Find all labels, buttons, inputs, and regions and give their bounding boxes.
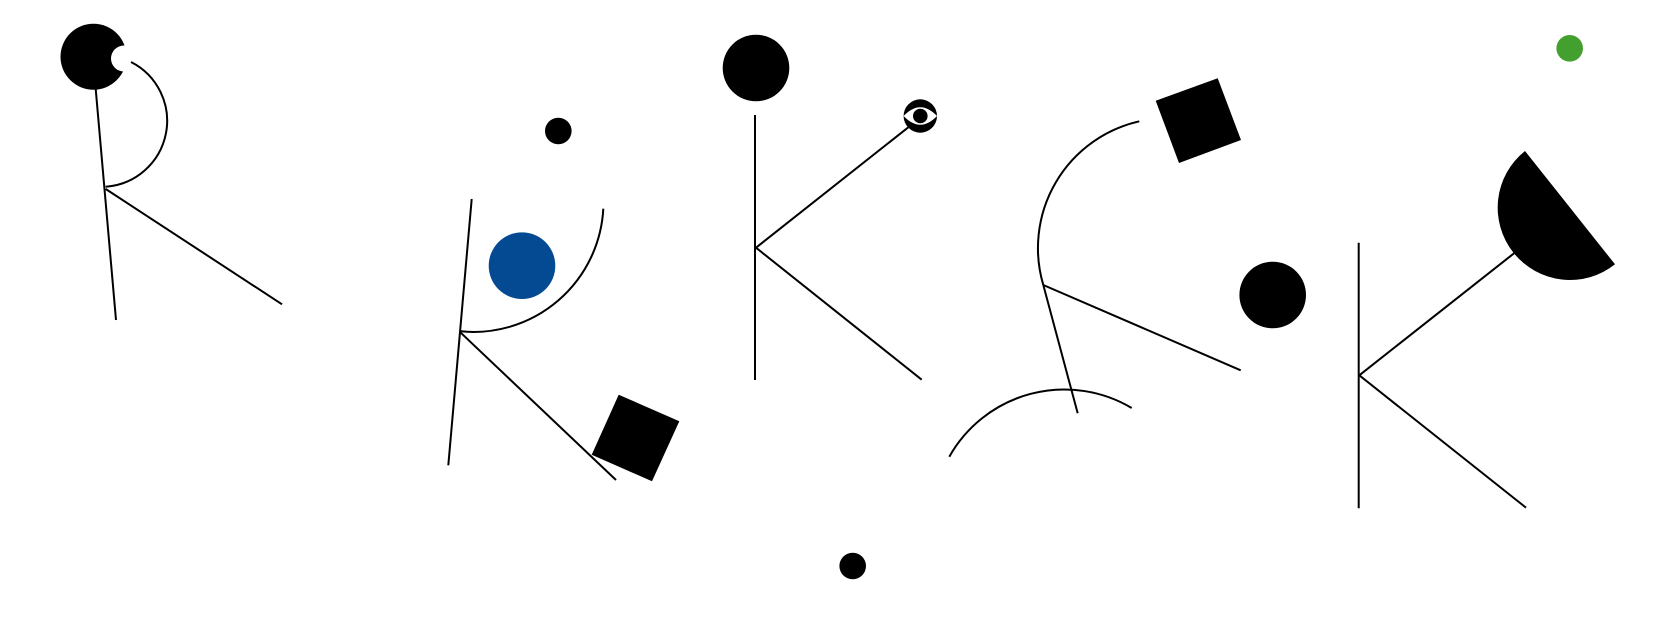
diagonal leg [1043,285,1241,370]
letter K five: half circle and green dot [1359,35,1615,508]
lower leg [1359,375,1526,508]
lower leg [756,248,922,380]
stem line [448,199,472,465]
black circle between letters [1239,262,1306,328]
icon: eye [904,99,937,133]
large black circle [723,35,789,101]
black tilted square [1156,78,1241,163]
upper arm [1359,253,1514,375]
letter R two: blue circle, arc and square [448,118,679,481]
stem line [754,115,756,380]
diagonal leg [461,333,616,480]
letter R four: rotated with square and lower arc [949,78,1241,457]
upper arm [756,127,908,248]
small black dot at bottom [839,553,866,579]
bowl arc [461,209,603,332]
blue circle [489,232,555,299]
black half circle [1498,151,1615,280]
small black dot [545,118,572,144]
icon: black circle with white bite [60,24,137,90]
bowl arc [1038,121,1139,285]
lower arc [949,389,1132,457]
green dot [1556,35,1583,62]
stem line [96,89,116,320]
stem line [1358,243,1360,508]
letter K three: circle head and eye icon [723,35,937,380]
stem line [1043,285,1078,413]
letter R one: circle head with arc and legs [60,24,282,320]
diagonal leg [106,189,282,304]
bowl arc [106,62,167,187]
black tilted square [592,395,679,481]
